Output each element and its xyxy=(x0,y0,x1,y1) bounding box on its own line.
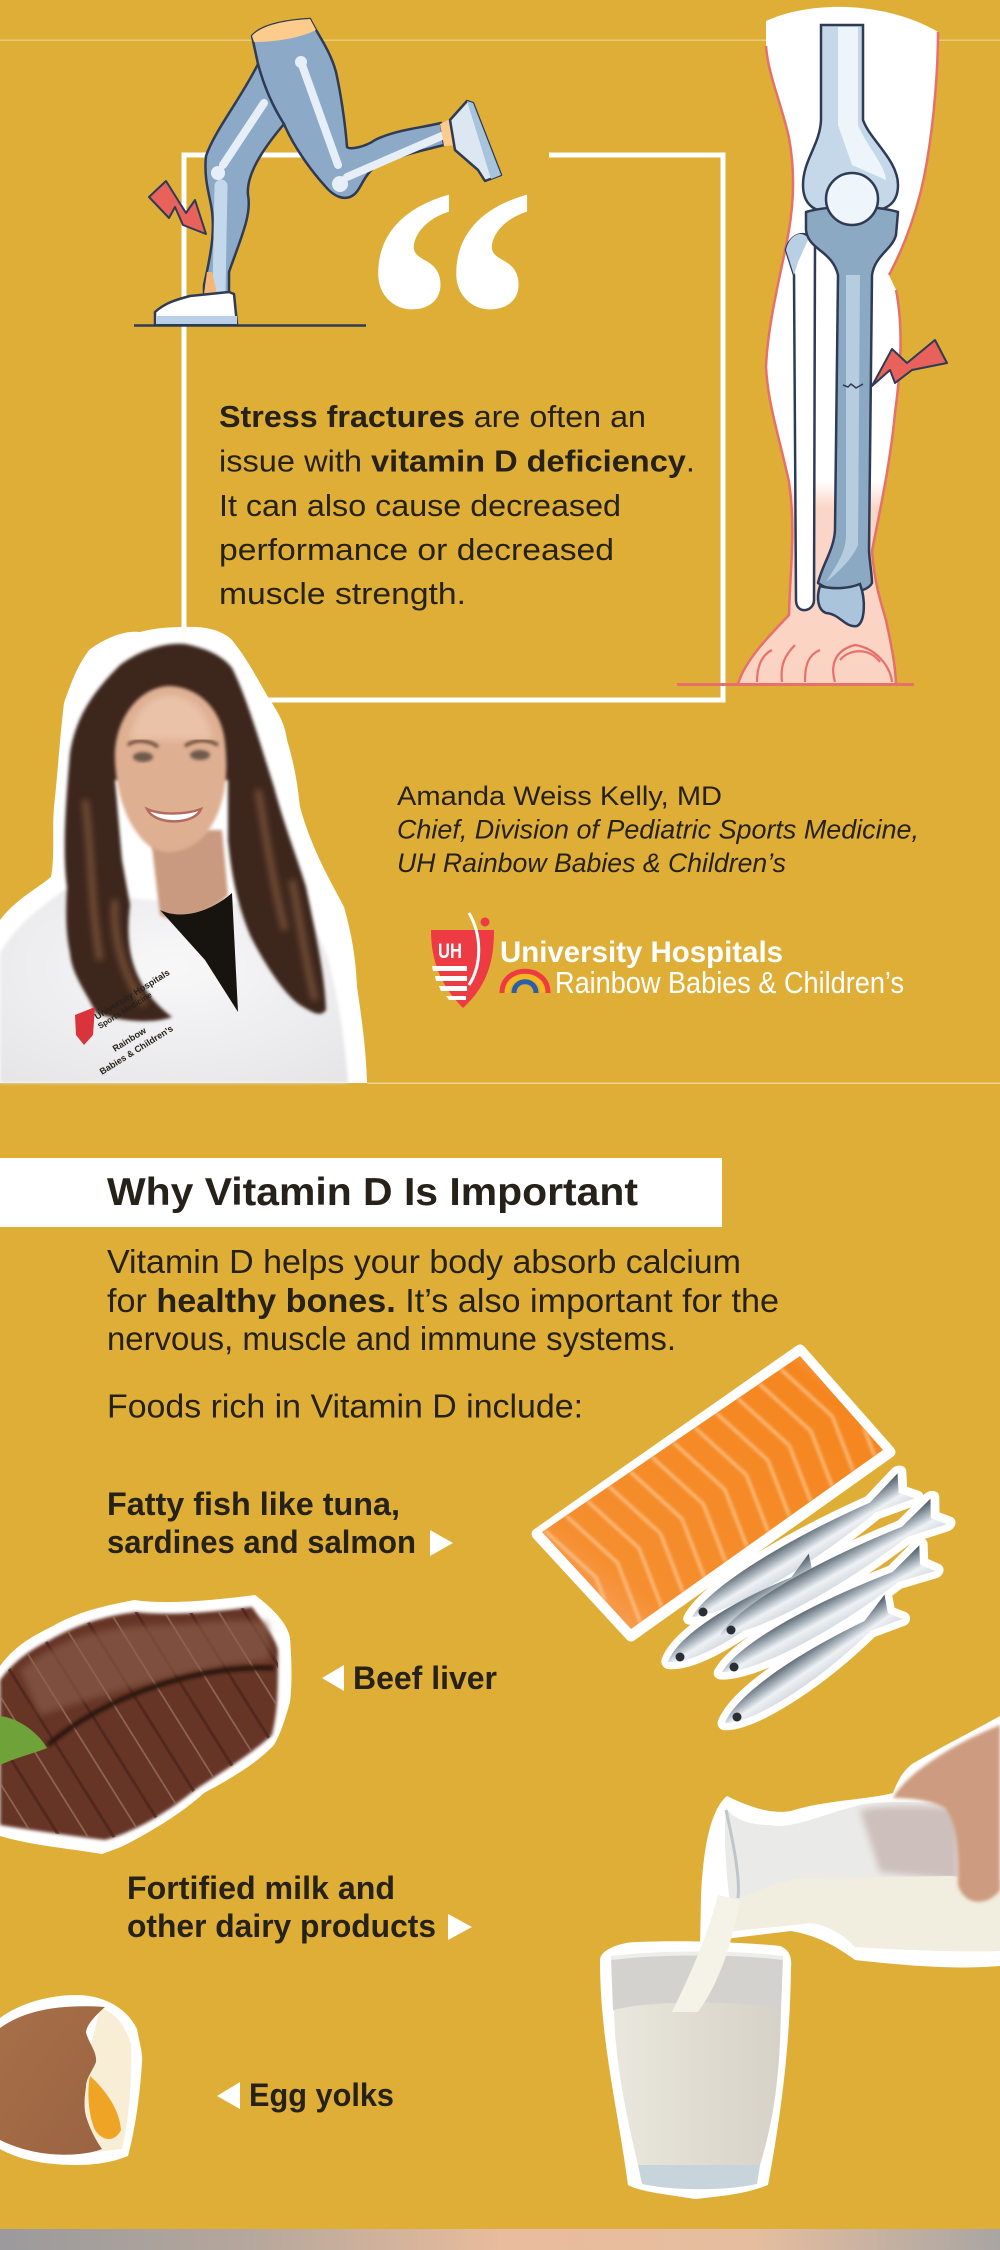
patella xyxy=(826,173,878,225)
hair xyxy=(65,644,326,1021)
bottle xyxy=(725,1802,1000,1951)
text: quote: Stress fractures are often an xyxy=(219,399,646,434)
heading band xyxy=(0,1158,722,1227)
leg silhouette xyxy=(204,19,444,296)
label: beef liver: Beef liver xyxy=(353,1660,497,1696)
photo: Amanda Weiss Kelly, MD: Rainbow xyxy=(111,1025,149,1054)
eyes xyxy=(128,741,218,762)
photo: Amanda Weiss Kelly, MD: University Hospitals xyxy=(93,967,171,1022)
logo wordmark: University Hospitals xyxy=(500,936,783,969)
photo: salmon fillet xyxy=(537,1350,890,1636)
femur xyxy=(803,25,898,212)
photo: cracked egg xyxy=(0,1995,142,2165)
bottle halo xyxy=(700,1716,1000,1967)
rear shoe xyxy=(440,118,458,146)
pain bolt xyxy=(149,181,206,234)
arrow xyxy=(448,1914,472,1940)
glass halo xyxy=(600,1941,791,2199)
text: intro: Vitamin D helps your body absorb calcium xyxy=(107,1243,741,1280)
hand xyxy=(893,1725,1000,1902)
text: quote: muscle strength. xyxy=(219,576,466,611)
shield xyxy=(431,930,494,1008)
photo: Amanda Weiss Kelly, MD: Babies & Children's xyxy=(98,1023,175,1077)
shell xyxy=(0,2006,105,2155)
photo: milk pouring into glass xyxy=(600,1716,1000,2199)
toes xyxy=(757,645,892,682)
next section photo strip xyxy=(0,2229,1000,2250)
leg outline xyxy=(738,7,938,684)
logo: University Hospitals Rainbow Babies & Children's xyxy=(431,913,904,1008)
fibula xyxy=(786,234,815,610)
fracture crack xyxy=(843,384,863,388)
arrow xyxy=(430,1530,453,1556)
photo: beef liver xyxy=(0,1595,292,1854)
fish halo xyxy=(659,1472,947,1734)
coat badge xyxy=(75,1007,95,1045)
text: attribution: Chief, Division of Pediatric Sports Medicine, xyxy=(397,814,919,844)
ground line xyxy=(134,324,366,327)
logo: University Hospitals Rainbow Babies & Children's: Rainbow Babies & Children’s xyxy=(555,965,904,1000)
photo: sardines xyxy=(659,1472,947,1734)
label: fatty fish: Fatty fish like tuna, xyxy=(107,1486,400,1522)
illustration: leg skeleton with fracture xyxy=(677,7,947,685)
text: attribution: Amanda Weiss Kelly, MD xyxy=(397,781,722,811)
label: fortified milk xyxy=(127,1870,472,1944)
heading: Why Vitamin D Is Important xyxy=(107,1171,638,1214)
text: foods intro: Foods rich in Vitamin D include: xyxy=(107,1388,583,1424)
text: intro: for healthy bones. It’s also important for the xyxy=(107,1282,779,1319)
text: intro xyxy=(107,1243,779,1357)
fish bodies xyxy=(659,1472,947,1734)
text: attribution xyxy=(397,781,919,878)
egg white xyxy=(80,2008,131,2152)
quote frame xyxy=(184,155,723,700)
face xyxy=(115,686,226,852)
quotation mark: “ xyxy=(361,108,539,530)
label: fortified milk: other dairy products xyxy=(127,1908,436,1944)
photo halo xyxy=(0,627,367,1083)
black shirt xyxy=(160,893,238,1012)
text: attribution: UH Rainbow Babies & Children’s xyxy=(397,848,786,878)
text: quote: performance or decreased xyxy=(219,532,614,567)
front shoe xyxy=(155,292,237,324)
logo: University Hospitals Rainbow Babies & Children's: UH xyxy=(438,940,462,963)
fish eyes xyxy=(676,1608,742,1722)
glass xyxy=(611,1954,783,2010)
pain bolt xyxy=(872,340,947,386)
text: intro: nervous, muscle and immune systems. xyxy=(107,1320,676,1357)
hip skin xyxy=(252,19,316,42)
milk stream xyxy=(672,1895,740,2012)
tibia xyxy=(806,207,898,592)
label: egg yolks: Egg yolks xyxy=(249,2077,394,2113)
text: quote: It can also cause decreased xyxy=(219,488,621,523)
ankle bone xyxy=(818,584,864,626)
label: fatty fish xyxy=(107,1486,453,1560)
photo: Amanda Weiss Kelly, MD xyxy=(0,627,367,1083)
leg bones xyxy=(301,62,338,165)
rainbow xyxy=(502,971,548,993)
neck xyxy=(150,830,228,919)
smile xyxy=(147,809,201,821)
lab coat xyxy=(0,890,348,1083)
label: fortified milk: Fortified milk and xyxy=(127,1870,395,1906)
illustration: running legs with injury xyxy=(134,19,501,326)
ground line xyxy=(677,683,914,686)
yolk xyxy=(88,2076,121,2139)
photo: Amanda Weiss Kelly, MD: Sports Medicine xyxy=(96,990,154,1031)
text: quote xyxy=(219,399,695,611)
label: fatty fish: sardines and salmon xyxy=(107,1524,416,1560)
text: quote: issue with vitamin D deficiency . xyxy=(219,444,695,478)
garnish leaf xyxy=(0,1716,47,1765)
